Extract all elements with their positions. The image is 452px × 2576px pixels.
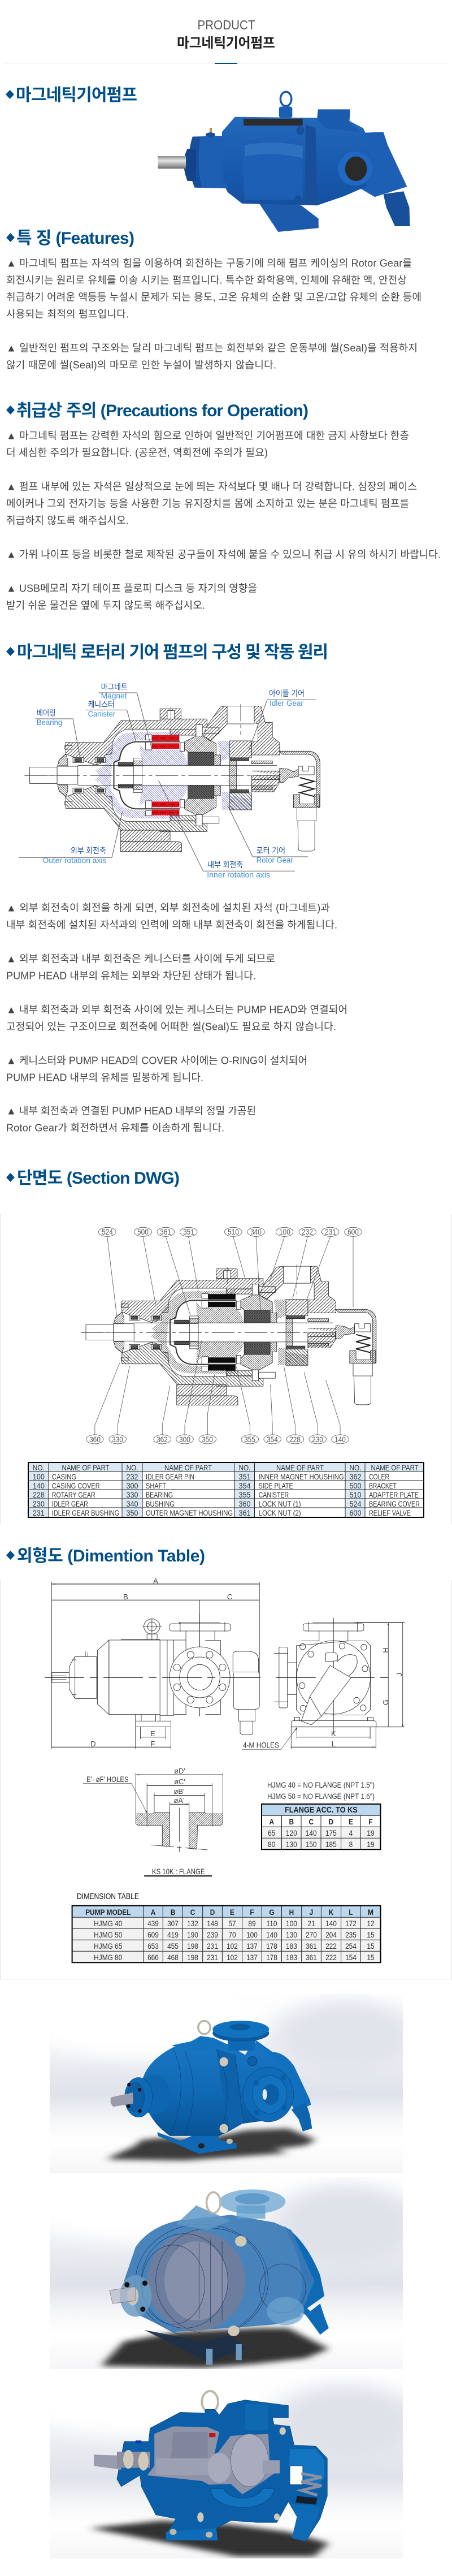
panel: section drawing and parts list xyxy=(0,1214,452,1525)
table: parts list: 100 xyxy=(33,1472,45,1481)
section drawing with part balloons: 361 xyxy=(160,1227,171,1236)
section drawing with part balloons: 340 xyxy=(250,1227,262,1236)
table: pump dimensions: 89 xyxy=(248,1919,256,1928)
table: pump dimensions: 609 xyxy=(147,1930,159,1939)
table: parts list: NAME OF PART xyxy=(276,1463,324,1472)
table: flange acc. to KS: C xyxy=(308,1817,314,1826)
table: pump dimensions: 102 xyxy=(227,1941,238,1951)
table: pump dimensions: 468 xyxy=(167,1953,179,1962)
heading: rotary gear pump structure and principle: 마그네틱 로터리 기어 펌프의 구성 및 작동 원리 xyxy=(17,643,328,662)
table: flange acc. to KS: 120 xyxy=(286,1828,297,1837)
table: flange acc. to KS: 140 xyxy=(306,1828,317,1837)
table: parts list: IDLER GEAR PIN xyxy=(146,1472,194,1481)
table: pump dimensions: E xyxy=(230,1908,234,1917)
outline drawing: side and end views xyxy=(45,1577,405,1750)
callout labels: 내부 회전축 xyxy=(207,860,243,869)
table: flange acc. to KS: E xyxy=(349,1817,353,1826)
table: flange acc. to KS: 19 xyxy=(367,1840,375,1849)
table: pump dimensions: M xyxy=(368,1908,373,1917)
table: pump dimensions: 178 xyxy=(266,1953,277,1962)
text block: operating principle: ▲ 외부 회전축과 내부 회전축은 케니스터를 사이에 두게 되므로 xyxy=(6,953,275,965)
table: flange acc. to KS: 8 xyxy=(349,1840,353,1849)
text block: precautions: 메이커나 그외 전자기능 등을 사용한 기능 유지장치를 몸에 소지하고 있는 분은 마그네틱 펌프를 xyxy=(6,498,409,509)
text block: precautions: ▲ 펌프 내부에 있는 자석은 일상적으로 눈에 띄는 자석보다 몇 배나 더 강력합니다. 심장의 페이스 xyxy=(6,481,417,492)
table: parts list: OUTER MAGNET HOUSHING xyxy=(146,1508,233,1517)
outline drawing: side and end views: K xyxy=(331,1729,336,1738)
table: pump dimensions: HJMG 40 xyxy=(94,1919,122,1928)
outline drawing: side and end views: L xyxy=(332,1740,336,1748)
table: parts list: 361 xyxy=(238,1508,251,1517)
table: pump dimensions: F xyxy=(250,1908,254,1917)
table: parts list: 232 xyxy=(127,1472,138,1481)
table: pump dimensions: 140 xyxy=(266,1930,277,1939)
table: pump dimensions: 183 xyxy=(286,1941,297,1951)
table: parts list: ROTARY GEAR xyxy=(52,1490,95,1499)
table: parts list: IDLER GEAR BUSHING xyxy=(52,1508,119,1517)
outline drawing: side and end views: A xyxy=(153,1577,158,1585)
table: parts list: NAME OF PART xyxy=(371,1463,419,1472)
table: parts list: 500 xyxy=(349,1481,362,1490)
page title: 마그네틱기어펌프 xyxy=(177,36,275,51)
section drawing with part balloons: 350 xyxy=(202,1435,213,1444)
table: pump dimensions: 140 xyxy=(325,1919,337,1928)
cross-section drawing xyxy=(19,693,320,871)
table: parts list: LOCK NUT (2) xyxy=(259,1508,301,1517)
heading: features: 특 징 (Features) xyxy=(16,229,134,248)
outline drawing: side and end views: D xyxy=(90,1740,95,1748)
text block: operating principle xyxy=(6,903,347,1133)
table: pump dimensions: 190 xyxy=(187,1930,198,1939)
text block: operating principle: ▲ 내부 회전축과 외부 회전축 사이에 있는 케니스터는 PUMP HEAD와 연결되어 xyxy=(6,1004,347,1016)
table: pump dimensions: 57 xyxy=(228,1919,236,1928)
outline drawing: side and end views: E xyxy=(150,1729,155,1738)
table: pump dimensions: 455 xyxy=(167,1941,179,1951)
callout labels: Magnet xyxy=(101,691,127,700)
render: solid 3D pump xyxy=(50,1995,403,2173)
section drawing with part balloons: 600 xyxy=(347,1227,359,1236)
table: parts list: 600 xyxy=(349,1508,362,1517)
render: transparent 3D pump xyxy=(50,2180,403,2369)
table: parts list: COLER xyxy=(369,1472,389,1481)
table: pump dimensions: D xyxy=(210,1908,215,1917)
table: flange acc. to KS: 175 xyxy=(325,1828,337,1837)
drawing: KS 10K flange: øB' xyxy=(173,1787,185,1796)
table: pump dimensions: 439 xyxy=(147,1919,159,1928)
table: flange acc. to KS: B xyxy=(289,1817,294,1826)
table: parts list: CASING xyxy=(52,1472,76,1481)
drawing: KS 10K flange: øC' xyxy=(174,1777,185,1786)
callout labels: 베어링 xyxy=(37,708,55,717)
table: pump dimensions: 15 xyxy=(367,1930,375,1939)
drawing: KS 10K flange xyxy=(83,1767,223,1876)
table: parts list: NO. xyxy=(127,1463,138,1472)
outline drawing: side and end views: 4-M HOLES xyxy=(243,1741,279,1750)
table: pump dimensions: 231 xyxy=(207,1941,218,1951)
text block: precautions: ▲ 가위 나이프 등을 비롯한 철로 제작된 공구들이 자석에 붙을 수 있으니 취급 시 유의 하시기 바랍니다. xyxy=(6,549,441,560)
table: pump dimensions xyxy=(72,1906,381,1962)
table: flange acc. to KS: 150 xyxy=(306,1840,317,1849)
table: pump dimensions: B xyxy=(171,1908,175,1917)
section drawing with part balloons: 300 xyxy=(179,1435,190,1444)
table: parts list: SIDE PLATE xyxy=(259,1481,293,1490)
text block: operating principle: ▲ 외부 회전축이 회전을 하게 되면, 외부 회전축에 설치된 자석 (마그네트)과 xyxy=(6,903,330,914)
table: parts list: CASING COVER xyxy=(52,1481,100,1490)
table: pump dimensions: PUMP MODEL xyxy=(85,1908,131,1917)
table: pump dimensions: 15 xyxy=(367,1953,375,1962)
table: pump dimensions: L xyxy=(349,1908,353,1917)
table: parts list: 524 xyxy=(349,1499,362,1508)
table: parts list: CANISTER xyxy=(259,1490,289,1499)
section drawing with part balloons: 231 xyxy=(325,1227,336,1236)
table: pump dimensions: A xyxy=(151,1908,156,1917)
table: pump dimensions: 15 xyxy=(367,1941,375,1951)
text block: features: 취급하기 어려운 액등등 누설시 문제가 되는 용도, 고온 유체의 순환 및 고온/고압 유체의 순환 등에 xyxy=(6,292,421,303)
text block: precautions: 더 세심한 주의가 필요합니다. (공운전, 역회전에 주의가 필요) xyxy=(6,447,268,458)
table: pump dimensions: 12 xyxy=(367,1919,375,1928)
table: flange acc. to KS: 19 xyxy=(367,1828,375,1837)
drawing: KS 10K flange: KS 10K : FLANGE xyxy=(152,1867,205,1876)
table: parts list: ADAPTER PLATE xyxy=(369,1490,419,1499)
text block: precautions: ▲ 마그네틱 펌프는 강력한 자석의 힘으로 인하여 일반적인 기어펌프에 대한 금지 사항보다 한층 xyxy=(6,430,409,441)
section drawing with part balloons: 100 xyxy=(279,1227,290,1236)
table: parts list: BEARING xyxy=(146,1490,173,1499)
table: flange acc. to KS: 130 xyxy=(286,1840,297,1849)
callout labels: Canister xyxy=(88,709,115,718)
table: pump dimensions: 137 xyxy=(246,1953,258,1962)
table: parts list: BRACKET xyxy=(369,1481,397,1490)
callout labels: 케니스터 xyxy=(88,700,115,709)
section drawing with part balloons: 355 xyxy=(244,1435,255,1444)
table: pump dimensions: 110 xyxy=(267,1919,277,1928)
drawing: KS 10K flange: E'- øF' HOLES xyxy=(86,1775,129,1784)
section drawing with part balloons: 524 xyxy=(102,1227,113,1236)
table: pump dimensions: 254 xyxy=(345,1941,357,1951)
section drawing with part balloons xyxy=(81,1227,376,1444)
table: parts list: 350 xyxy=(127,1508,138,1517)
table: pump dimensions: J xyxy=(310,1908,313,1917)
drawing: KS 10K flange: øA' xyxy=(173,1796,185,1805)
table: flange acc. to KS: 185 xyxy=(325,1840,337,1849)
callout labels: Bearing xyxy=(37,718,62,727)
table: parts list: LOCK NUT (1) xyxy=(259,1499,301,1508)
table: parts list: 230 xyxy=(33,1499,45,1508)
table: pump dimensions: HJMG 65 xyxy=(94,1941,122,1951)
heading: precautions for operation: 취급상 주의 (Precautions for Operation) xyxy=(16,402,308,420)
table: pump dimensions: 100 xyxy=(286,1919,297,1928)
note: NPT sizes xyxy=(267,1780,375,1801)
table: parts list: 354 xyxy=(238,1481,251,1490)
table: flange acc. to KS: 80 xyxy=(268,1840,275,1849)
table: parts list: 360 xyxy=(238,1499,251,1508)
callout labels: 마그네트 xyxy=(101,682,128,691)
heading: dimension table: 외형도 (Dimention Table) xyxy=(17,1547,205,1565)
table: parts list xyxy=(28,1462,424,1517)
diagram: labelled pump cross-section xyxy=(19,682,320,879)
section drawing with part balloons: 362 xyxy=(157,1435,168,1444)
table: pump dimensions: HJMG 80 xyxy=(94,1953,122,1962)
outline drawing: side and end views: B xyxy=(123,1593,128,1601)
text block: features: ▲ 마그네틱 펌프는 자석의 힘을 이용하여 회전하는 구동기에 의해 펌프 케이싱의 Rotor Gear를 xyxy=(6,258,412,269)
photo: blue magnetic gear pump xyxy=(158,92,410,232)
table: flange acc. to KS xyxy=(262,1804,381,1849)
table: parts list: INNER MAGNET HOUSHING xyxy=(259,1472,344,1481)
table: pump dimensions: 198 xyxy=(187,1953,198,1962)
outline drawing: side and end views: J xyxy=(395,1673,403,1676)
section drawing with part balloons: 510 xyxy=(228,1227,239,1236)
table: parts list: 340 xyxy=(127,1499,138,1508)
callout labels: Inner rotation axis xyxy=(207,870,270,879)
table: parts list: 231 xyxy=(33,1508,45,1517)
table: parts list: 355 xyxy=(238,1490,251,1499)
text block: precautions: 받기 쉬운 물건은 옆에 두지 않도록 해주십시오. xyxy=(6,599,205,611)
table: flange acc. to KS: 65 xyxy=(268,1828,275,1837)
text block: operating principle: ▲ 케니스터와 PUMP HEAD의 COVER 사이에는 O-RING이 설치되어 xyxy=(6,1055,307,1067)
section drawing with part balloons: 360 xyxy=(89,1435,101,1444)
text block: features: 회전시키는 원리로 유체를 이송 시키는 펌프입니다. 특수한 화학용액, 인체에 유해한 액, 안전상 xyxy=(6,275,407,286)
table: pump dimensions: 419 xyxy=(167,1930,179,1939)
table: pump dimensions: 132 xyxy=(187,1919,198,1928)
drawing: KS 10K flange: øD' xyxy=(174,1767,185,1775)
table: parts list: BUSHING xyxy=(146,1499,175,1508)
panel: outline dimensions xyxy=(0,1577,452,1979)
table: pump dimensions: 148 xyxy=(207,1919,218,1928)
table: flange acc. to KS: 4 xyxy=(349,1828,353,1837)
heading: magnetic gear pump: 마그네틱기어펌프 xyxy=(16,86,137,105)
table: pump dimensions: 130 xyxy=(286,1930,297,1939)
text block: operating principle: PUMP HEAD 내부의 유체를 밀봉하게 됩니다. xyxy=(6,1072,203,1084)
table: pump dimensions: 204 xyxy=(325,1930,337,1939)
note: NPT sizes: HJMG 40 = NO FLANGE (NPT 1.5") xyxy=(267,1780,375,1789)
section drawing with part balloons: 230 xyxy=(312,1435,323,1444)
section drawing with part balloons: 140 xyxy=(334,1435,346,1444)
page header xyxy=(4,18,448,64)
table: pump dimensions: 222 xyxy=(325,1941,337,1951)
table: pump dimensions: 183 xyxy=(286,1953,297,1962)
text block: operating principle: PUMP HEAD 내부의 유체는 외부와 차단된 상태가 됩니다. xyxy=(6,970,256,982)
table: flange acc. to KS: F xyxy=(368,1817,373,1826)
section drawing with part balloons: 500 xyxy=(137,1227,149,1236)
table: flange acc. to KS: A xyxy=(269,1817,275,1826)
note: NPT sizes: HJMG 50 = NO FLANGE (NPT 1.6") xyxy=(267,1792,375,1801)
text block: precautions: 취급하지 않도록 해주십시오. xyxy=(6,515,129,526)
table: parts list: NO. xyxy=(349,1463,362,1472)
outline drawing: side and end views: C xyxy=(227,1593,232,1601)
table: parts list: 228 xyxy=(33,1490,45,1499)
callout labels: Idler Gear xyxy=(270,698,303,707)
text block: features: 않기 때문에 씰(Seal)의 마모로 인한 누설이 발생하지 않습니다. xyxy=(6,360,276,371)
table: pump dimensions: K xyxy=(329,1908,334,1917)
table: parts list: IDLER GEAR xyxy=(52,1499,88,1508)
table: pump dimensions: 361 xyxy=(306,1953,317,1962)
text block: precautions: ▲ USB메모리 자기 테이프 플로피 디스크 등 자기의 영향을 xyxy=(6,582,257,594)
table title: DIMENSION TABLE xyxy=(77,1892,139,1901)
table: parts list: RELIEF VALVE xyxy=(369,1508,411,1517)
callout labels: Rotor Gear xyxy=(257,855,293,864)
text block: operating principle: Rotor Gear가 회전하면서 유체를 이송하게 됩니다. xyxy=(6,1122,224,1133)
table: parts list: NO. xyxy=(238,1463,251,1472)
section drawing with part balloons: 232 xyxy=(302,1227,313,1236)
text block: features: 사용되는 최적의 펌프입니다. xyxy=(6,309,129,320)
table: pump dimensions: 70 xyxy=(228,1930,236,1939)
table: flange acc. to KS: FLANGE ACC. TO KS xyxy=(285,1805,358,1814)
table: pump dimensions: 307 xyxy=(167,1919,179,1928)
table: pump dimensions: 666 xyxy=(147,1953,159,1962)
callout labels: 아이들 기어 xyxy=(269,689,305,698)
table: pump dimensions: HJMG 50 xyxy=(94,1930,122,1939)
table: pump dimensions: 361 xyxy=(306,1941,317,1951)
callout labels: 로터 기어 xyxy=(257,846,285,855)
outline drawing: side and end views: G xyxy=(381,1699,390,1705)
section drawing with part balloons: 330 xyxy=(112,1435,123,1444)
section drawing with part balloons: 351 xyxy=(183,1227,194,1236)
callout labels: Outer rotation axis xyxy=(43,856,106,865)
table: parts list: 510 xyxy=(349,1490,362,1499)
outline drawing: side and end views: F xyxy=(150,1740,155,1748)
table: parts list: 330 xyxy=(127,1490,138,1499)
table: parts list: NO. xyxy=(33,1463,45,1472)
eyebrow: PRODUCT: PRODUCT xyxy=(198,18,255,32)
table: flange acc. to KS: D xyxy=(328,1817,333,1826)
table: pump dimensions: 178 xyxy=(266,1941,277,1951)
table: parts list: NAME OF PART xyxy=(62,1463,110,1472)
table: pump dimensions: 239 xyxy=(207,1930,218,1939)
text block: operating principle: 고정되어 있는 구조이므로 회전축에 어떠한 씰(Seal)도 필요로 하지 않습니다. xyxy=(6,1021,336,1033)
table: pump dimensions: 270 xyxy=(306,1930,317,1939)
heading: section drawing: 단면도 (Section DWG) xyxy=(17,1169,180,1188)
table: parts list: SHAFT xyxy=(146,1481,166,1490)
table: pump dimensions: H xyxy=(289,1908,294,1917)
table: pump dimensions: 154 xyxy=(345,1953,357,1962)
section drawing with part balloons: 228 xyxy=(289,1435,301,1444)
table: pump dimensions: G xyxy=(269,1908,275,1917)
table: parts list: BEARING COVER xyxy=(369,1499,420,1508)
section drawing with part balloons: 354 xyxy=(267,1435,278,1444)
text block: precautions xyxy=(6,430,441,611)
render: cutaway 3D pump xyxy=(50,2380,403,2558)
table: pump dimensions: 21 xyxy=(307,1919,315,1928)
table: pump dimensions: 222 xyxy=(325,1953,337,1962)
callout labels: 외부 회전축 xyxy=(71,846,106,855)
callout labels xyxy=(37,682,305,879)
table: pump dimensions: 102 xyxy=(227,1953,238,1962)
text block: operating principle: ▲ 내부 회전축과 연결된 PUMP HEAD 내부의 정밀 가공된 xyxy=(6,1105,256,1116)
table: pump dimensions: 137 xyxy=(246,1941,258,1951)
table: pump dimensions: 235 xyxy=(345,1930,357,1939)
table: parts list: NAME OF PART xyxy=(164,1463,212,1472)
table: parts list: 362 xyxy=(349,1472,362,1481)
table: parts list: 300 xyxy=(127,1481,138,1490)
table: pump dimensions: 231 xyxy=(207,1953,218,1962)
outline drawing: side and end views: H xyxy=(381,1647,390,1653)
text block: features xyxy=(6,258,421,371)
table: parts list: 351 xyxy=(238,1472,251,1481)
table: pump dimensions: 653 xyxy=(147,1941,159,1951)
table: pump dimensions: 198 xyxy=(187,1941,198,1951)
table: parts list: 140 xyxy=(33,1481,45,1490)
text block: features: ▲ 일반적인 펌프의 구조와는 달리 마그네틱 펌프는 회전부와 같은 운동부에 씰(Seal)을 적용하지 xyxy=(6,343,418,354)
table: pump dimensions: C xyxy=(190,1908,195,1917)
text block: operating principle: 내부 회전축에 설치된 자석과의 인력에 의해 내부 회전축이 회전을 하게됩니다. xyxy=(6,920,337,931)
table: pump dimensions: 172 xyxy=(345,1919,357,1928)
table: pump dimensions: 100 xyxy=(246,1930,258,1939)
